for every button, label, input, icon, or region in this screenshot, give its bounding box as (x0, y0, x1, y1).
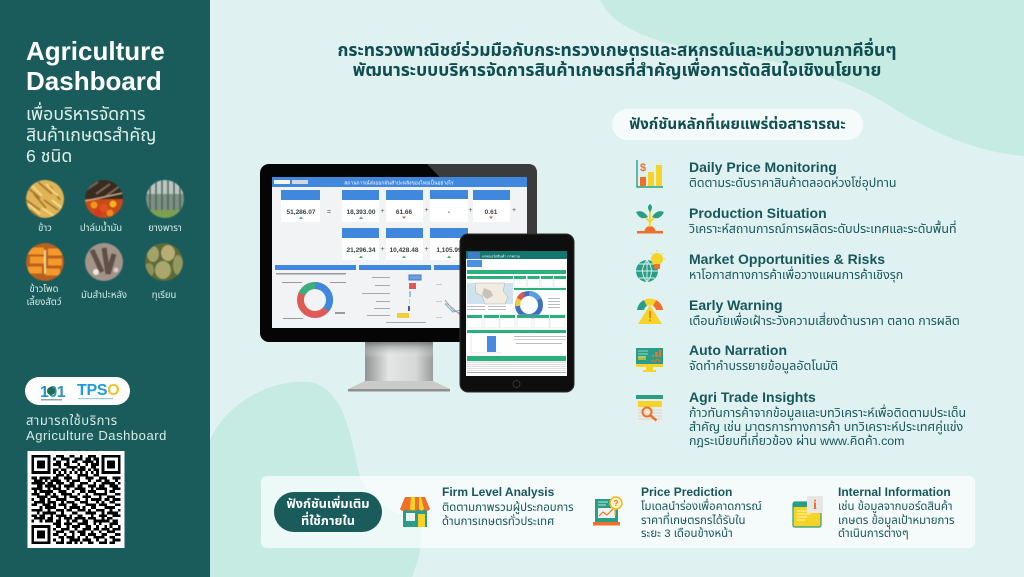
service text: สามารถใช้บริการ (26, 413, 118, 428)
label: cassava: มันสำปะหลัง (81, 290, 127, 301)
logo pill: 101 (40, 384, 66, 401)
pill: main public functions: ฟังก์ชันหลักที่เผยแพร่ต่อสาธารณะ (629, 116, 846, 133)
feature: market opportunities (689, 251, 903, 282)
feature: internal information: ดำเนินการต่างๆ (838, 528, 909, 540)
label: rubber: ยางพารา (148, 223, 182, 234)
title (26, 36, 165, 96)
main heading: กระทรวงพาณิชย์ร่วมมือกับกระทรวงเกษตรและสหกรณ์และหน่วยงานภาคีอื่นๆ (337, 40, 897, 60)
feature: early warning: เตือนภัยเพื่อเฝ้าระวังความเสี่ยงด้านราคา ตลาด การผลิต (689, 314, 960, 328)
desktop monitor with dashboard: - (448, 209, 450, 216)
icon: plant (636, 204, 664, 234)
pill: main public functions (612, 109, 863, 140)
internal functions pill: ที่ใช้ภายใน (301, 513, 355, 528)
icon: globe and bulb (636, 250, 665, 282)
desktop monitor with dashboard: 10,428.48 (390, 247, 419, 254)
desktop monitor with dashboard: + (424, 207, 429, 214)
internal functions pill: ฟังก์ชันเพิ่มเติม (286, 496, 370, 511)
feature: agri trade insights: Agri Trade Insights (689, 389, 816, 405)
feature: early warning: Early Warning (689, 297, 783, 313)
icon: price chart: $ (640, 162, 646, 174)
feature: market opportunities: หาโอกาสทางการค้าเพื่อวางแผนการค้าเชิงรุก (689, 268, 903, 282)
label: rice: ข้าว (38, 223, 52, 234)
feature: daily price monitoring (689, 159, 896, 190)
icon: trade insights (636, 395, 663, 424)
icon: warning gauge (637, 298, 663, 324)
feature: agri trade insights: กฎระเบียบที่เกี่ยวข้อง ผ่าน www.คิดค้า.com (689, 434, 904, 448)
desktop monitor with dashboard: + (468, 207, 473, 214)
feature: price prediction: ราคาที่เกษตรกรได้รับใน (641, 514, 745, 526)
subtitle: เพื่อบริหารจัดการ (26, 104, 146, 124)
feature: internal information: Internal Information (838, 485, 951, 499)
label: durian: ทุเรียน (152, 290, 176, 301)
feature: price prediction: โมเดลนำร่องเพื่อคาดการณ์ (641, 501, 762, 513)
feature: production situation: Production Situation (689, 205, 827, 221)
label: maize: เลี้ยงสัตว์ (26, 297, 62, 308)
logo pill: TPSO (77, 382, 119, 399)
desktop monitor with dashboard: + (380, 246, 385, 253)
feature: price prediction: ระยะ 3 เดือนข้างหน้า (641, 528, 733, 540)
desktop monitor with dashboard: สถานการณ์ส่งออกมันสำปะหลังของไทยเป็นอย่างไร (344, 178, 454, 186)
subtitle: 6 ชนิด (26, 146, 72, 166)
desktop monitor with dashboard: + (512, 207, 516, 214)
feature: daily price monitoring: ติดตามระดับราคาสินค้าตลอดห่วงโซ่อุปทาน (689, 176, 896, 190)
subtitle (26, 102, 156, 166)
desktop monitor with dashboard: 51,286.07 (287, 209, 316, 216)
QR code (28, 451, 124, 548)
icon: monitor narration (636, 348, 663, 372)
desktop monitor with dashboard: 18,393.00 (347, 209, 376, 216)
feature: firm level analysis: ติดตามภาพรวมผู้ประกอบการ (442, 502, 574, 514)
icon: internal information (792, 496, 823, 528)
feature: auto narration: Auto Narration (689, 342, 787, 358)
feature: auto narration (689, 342, 838, 374)
feature: price prediction: Price Prediction (641, 485, 732, 499)
feature: price prediction (641, 485, 762, 540)
main heading: พัฒนาระบบบริหารจัดการสินค้าเกษตรที่สำคัญเพื่อการตัดสินใจเชิงนโยบาย (353, 60, 881, 80)
feature: internal information (838, 485, 955, 540)
feature: auto narration: จัดทำคำบรรยายข้อมูลอัตโนมัติ (689, 359, 838, 373)
icon: price chart (636, 160, 663, 188)
feature: firm level analysis: Firm Level Analysis (442, 485, 554, 499)
icon: price prediction: ? (614, 499, 619, 508)
feature: agri trade insights (689, 389, 966, 448)
feature: early warning (689, 297, 960, 328)
desktop monitor with dashboard: 0.61 (485, 209, 498, 216)
desktop monitor with dashboard: 61.66 (396, 209, 413, 216)
desktop monitor with dashboard: = (327, 209, 331, 216)
subtitle: สินค้าเกษตรสำคัญ (26, 125, 156, 145)
feature: production situation (688, 205, 957, 236)
desktop monitor with dashboard: + (424, 246, 429, 253)
icon: store (400, 497, 430, 527)
feature: agri trade insights: ก้าวทันการค้าจากข้อมูลและบทวิเคราะห์เพื่อติดตามประเด็น (689, 406, 966, 420)
feature: market opportunities: Market Opportunities & Risks (689, 251, 885, 267)
panel: additional internal functions (261, 476, 975, 548)
icon: internal information: i (813, 498, 817, 513)
desktop monitor with dashboard (260, 164, 537, 392)
feature: production situation: วิเคราะห์สถานการณ์การผลิตระดับประเทศและระดับพื้นที่ (689, 222, 957, 236)
tablet with dashboard (460, 234, 574, 392)
feature: daily price monitoring: Daily Price Monitoring (689, 159, 837, 175)
label: maize (26, 284, 62, 308)
main heading (337, 38, 897, 80)
desktop monitor with dashboard: + (380, 208, 385, 215)
desktop monitor with dashboard: 1,105.99 (436, 247, 462, 254)
commodity photos (25, 179, 184, 282)
feature: internal information: เกษตร ข้อมูลเป้าหมายการ (838, 514, 955, 526)
tablet with dashboard: แดชบอร์ดสินค้า ภาพรวม (482, 254, 520, 258)
left sidebar panel (0, 0, 210, 577)
title: Agriculture (26, 36, 165, 66)
service text (26, 413, 167, 443)
feature: firm level analysis: ด้านการเกษตรทั่วประเทศ (442, 516, 554, 528)
desktop monitor with dashboard: 21,296.34 (347, 247, 376, 254)
service text: Agriculture Dashboard (26, 428, 167, 443)
feature: agri trade insights: สำคัญ เช่น มาตรการทางการค้า บทวิเคราะห์ประเทศคู่แข่ง (689, 420, 963, 434)
logo pill (25, 377, 130, 405)
feature: internal information: เช่น ข้อมูลจากบอร์ดสินค้า (838, 501, 953, 513)
label: maize: ข้าวโพด (30, 284, 58, 295)
label: oil palm: ปาล์มน้ำมัน (80, 223, 122, 234)
icon: price prediction (593, 496, 623, 526)
internal functions pill (274, 492, 382, 532)
feature: firm level analysis (442, 485, 574, 528)
title: Dashboard (26, 66, 162, 96)
